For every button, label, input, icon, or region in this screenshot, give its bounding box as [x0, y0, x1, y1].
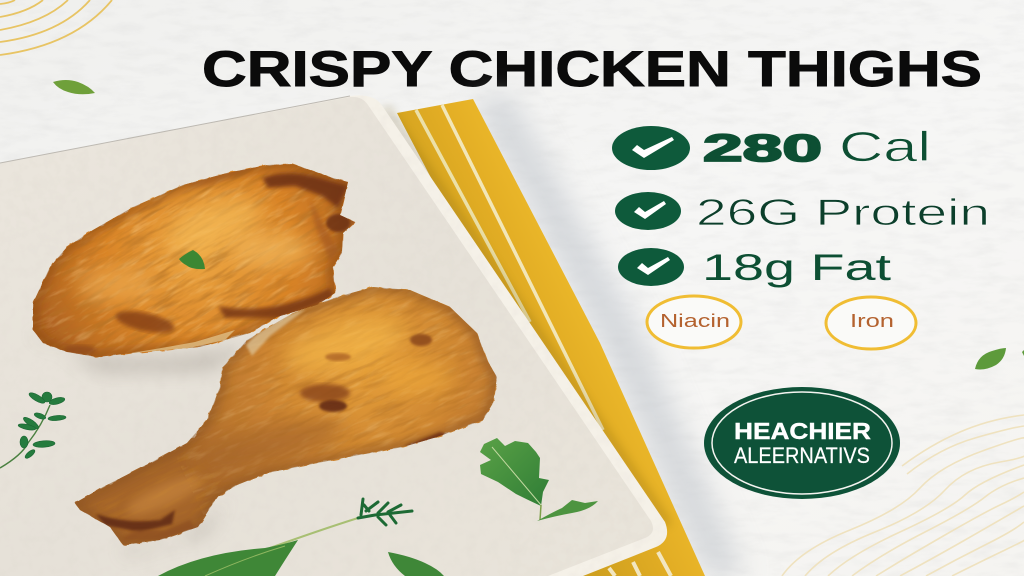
item: fat: 18g Fat: [702, 247, 892, 288]
decorative gold arcs: top left: [0, 0, 112, 55]
leaf: bottom: [388, 552, 444, 576]
chicken drumstick: [74, 286, 497, 546]
badge: niacin: [647, 296, 741, 348]
nutrition list: [612, 123, 990, 288]
herb sprig: bottom centre: [158, 499, 412, 576]
plate shadow: [385, 108, 668, 525]
item: fat: [618, 247, 892, 288]
item: calories: [612, 123, 931, 170]
title: CRISPY CHICKEN THIGHS: [202, 41, 982, 97]
band shadow: [473, 95, 745, 576]
badge: healthier alternatives: [704, 387, 900, 499]
badge: iron: [826, 297, 916, 349]
chicken thigh: [32, 164, 356, 358]
herb sprig: thyme left: [0, 391, 66, 468]
decorative gold waves: bottom right: [782, 415, 1024, 576]
badge: healthier alternatives: ALEERNATIVS: [734, 443, 870, 468]
badge: healthier alternatives: HEACHIER: [734, 418, 871, 444]
leaf: right: [975, 348, 1024, 370]
chicken shadows: [28, 330, 250, 556]
plate: [0, 96, 668, 576]
item: protein: 26G Protein: [696, 192, 990, 233]
badge: niacin: Niacin: [660, 311, 730, 331]
item: calories: 280: [703, 128, 822, 170]
leaf: top left: [53, 80, 95, 94]
parsley leaf: right: [480, 438, 598, 521]
badge: iron: Iron: [850, 311, 894, 331]
item: protein: [615, 192, 990, 233]
item: calories: Cal: [839, 123, 931, 170]
yellow striped band: [397, 99, 705, 576]
garnish on thigh: [179, 250, 205, 269]
